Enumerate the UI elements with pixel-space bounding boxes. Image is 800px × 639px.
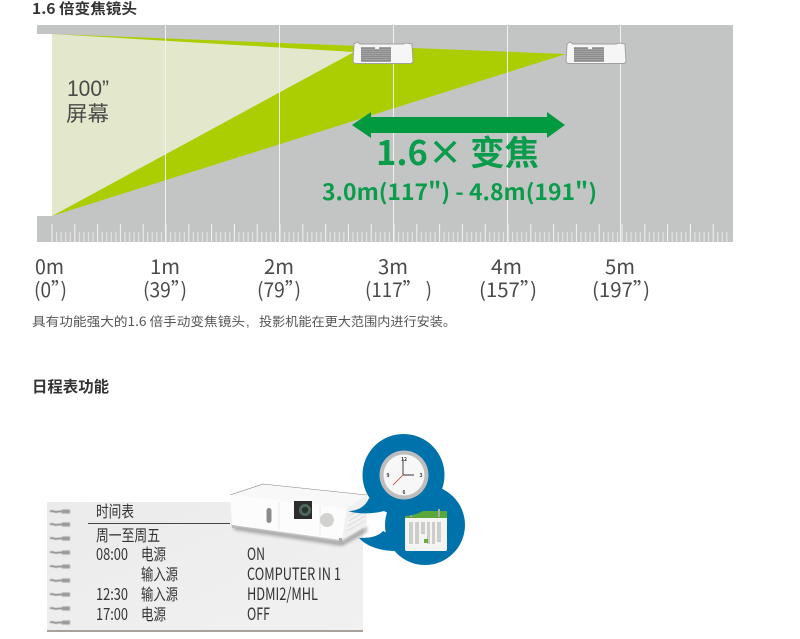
icon: clock bubble <box>348 434 444 516</box>
screen size label: 屏幕 <box>66 98 109 128</box>
calendar <box>405 509 447 551</box>
heading: schedule function: 日程表功能 <box>32 375 110 397</box>
icon: projector far position <box>566 42 626 64</box>
clock: 3 <box>420 472 423 479</box>
schedule table text: 17:00 <box>96 601 128 625</box>
projector front face <box>230 495 347 540</box>
projector top surface <box>230 484 367 508</box>
axis labels: distance: (197”) <box>592 274 650 303</box>
schedule table text: 12:30 <box>96 581 128 605</box>
axis labels: distance <box>34 251 650 303</box>
axis labels: distance: 5m <box>605 251 635 280</box>
axis labels: distance: 2m <box>264 251 294 280</box>
axis labels: distance: (79”) <box>257 274 301 303</box>
icon: calendar bubble <box>359 485 465 565</box>
caption: 投影机能在更大范围内进行安装。 <box>259 311 456 330</box>
schedule table text: 输入源 <box>141 561 178 585</box>
clock: 12 <box>401 456 407 463</box>
chart: wide throw cone <box>52 34 354 216</box>
axis labels: distance: 4m <box>491 251 522 280</box>
schedule table text: 周一至周五 <box>96 522 160 546</box>
clock: 6 <box>403 489 406 496</box>
screen size label <box>66 76 109 128</box>
schedule table text: 输入源 <box>141 581 178 605</box>
schedule table text: 电源 <box>141 541 166 565</box>
axis labels: distance: 1m <box>150 251 180 280</box>
schedule table text: ON <box>247 540 265 565</box>
projector lens <box>294 501 312 519</box>
panel: schedule notebook <box>47 498 363 632</box>
axis labels: distance: (157”) <box>479 274 537 303</box>
axis labels: distance: (117” ) <box>365 274 432 303</box>
schedule table text <box>96 498 341 625</box>
schedule table text: 时间表 <box>96 498 134 522</box>
chart: full zoom throw cone <box>52 34 566 216</box>
caption <box>32 311 456 330</box>
projector speaker <box>320 513 334 527</box>
axis labels: distance: (39”) <box>143 274 187 303</box>
axis labels: distance: (0”) <box>34 274 67 303</box>
caption: 具有功能强大的1.6 倍手动变焦镜头 <box>32 311 245 330</box>
projector side face <box>342 495 367 540</box>
schedule table text: OFF <box>247 600 270 625</box>
clock: 9 <box>387 472 390 479</box>
spiral binding <box>50 510 70 624</box>
schedule table text: HDMI2/MHL <box>247 580 318 605</box>
screen size label: 100” <box>67 76 109 101</box>
schedule table text: 电源 <box>141 601 166 625</box>
schedule table text: COMPUTER IN 1 <box>247 560 341 585</box>
panel: zoom distance diagram <box>37 25 733 242</box>
schedule table text: 08:00 <box>96 541 128 565</box>
icon: front of projector <box>230 484 367 546</box>
icon: projector near position <box>353 42 413 64</box>
clock <box>380 450 428 500</box>
zoom label: 1.6× 变焦 <box>376 126 539 175</box>
arrow: zoom range <box>352 112 565 138</box>
axis labels: distance: 0m <box>35 251 64 280</box>
zoom distance range: 3.0m(117") - 4.8m(191") <box>322 175 597 207</box>
axis labels: distance: 3m <box>378 251 408 280</box>
caption: , <box>246 314 250 329</box>
